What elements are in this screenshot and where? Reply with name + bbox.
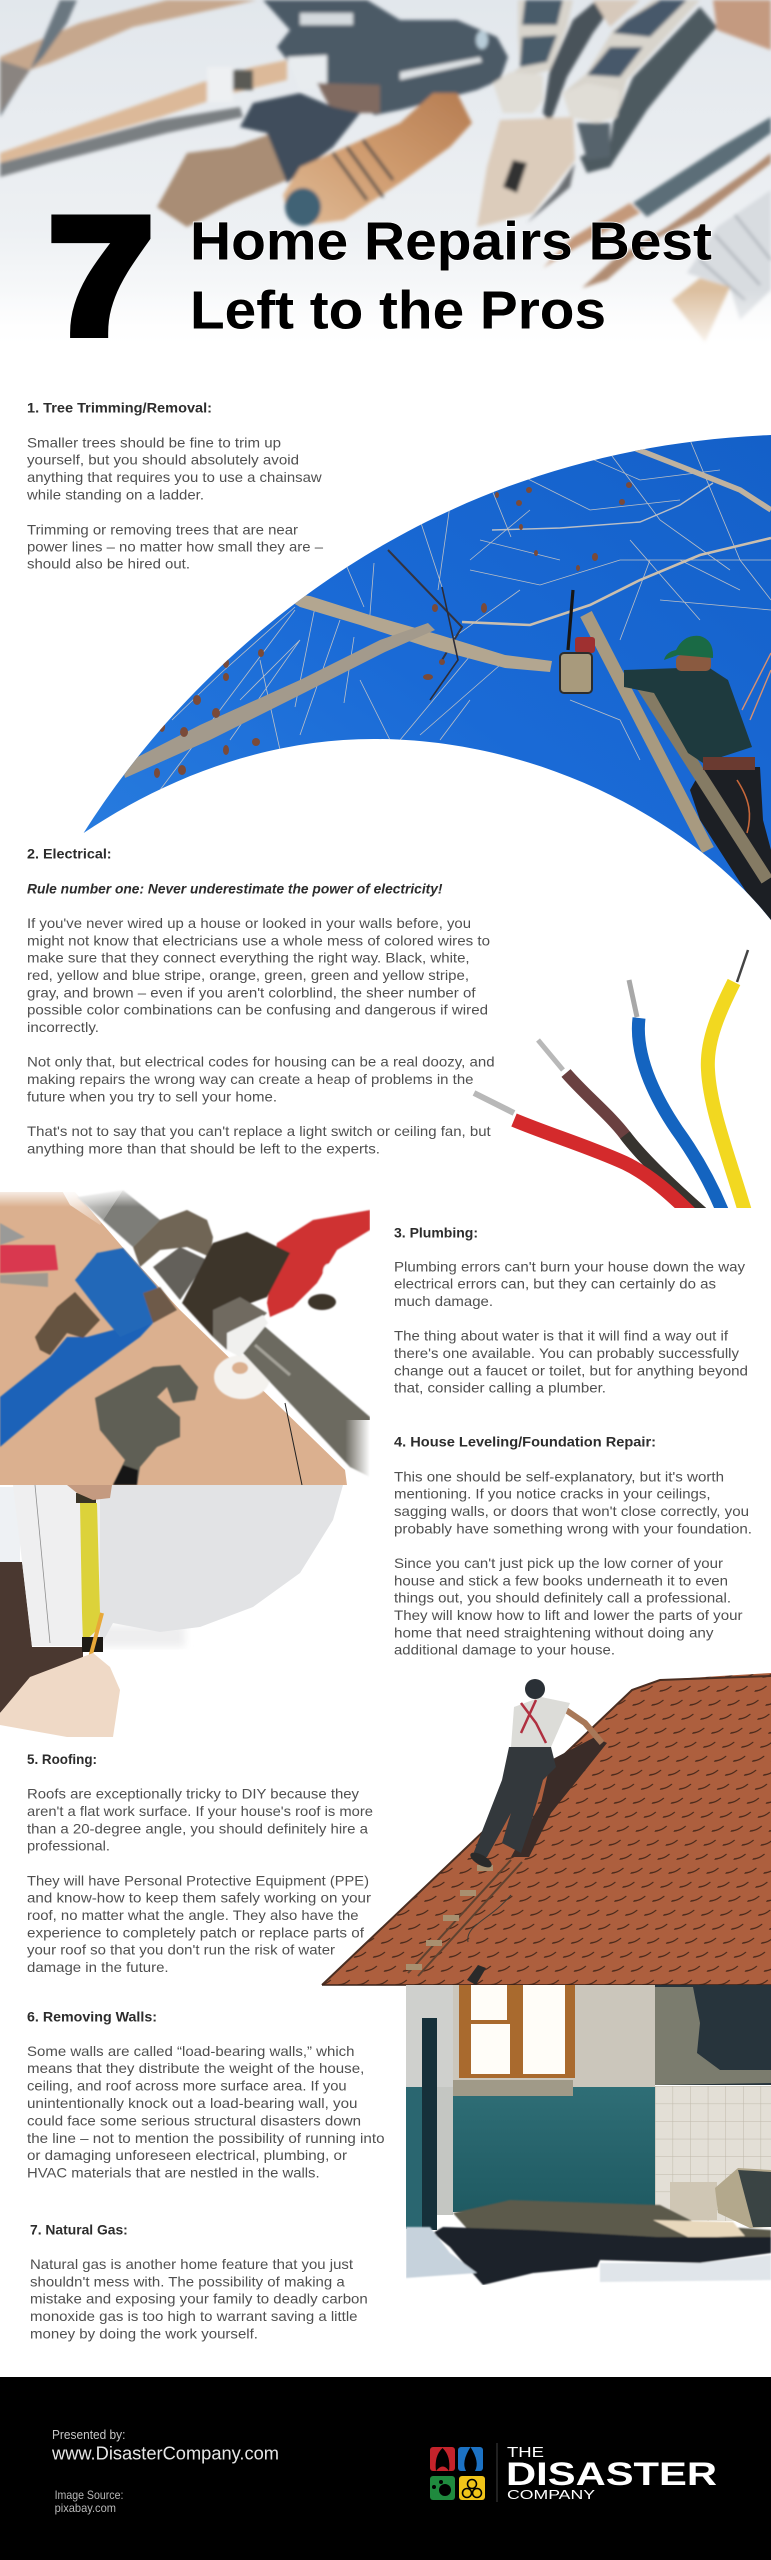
big number 7: 7 xyxy=(49,184,153,368)
paragraphs: change out a faucet or toilet, but for anything beyond xyxy=(394,1362,748,1378)
paragraph: means that they distribute the weight of the house, xyxy=(27,2060,364,2076)
photo: plumbing wrenches xyxy=(0,1187,370,1485)
section 7: natural gas text xyxy=(30,2222,368,2342)
paragraphs: making repairs the wrong way can create a heap of problems in the xyxy=(27,1071,474,1087)
paragraphs xyxy=(394,1468,752,1658)
photo: gutted room with demolished wall xyxy=(406,1985,771,2285)
roof ladder xyxy=(406,1860,522,1985)
paragraphs: roof, no matter what the angle. They also have the xyxy=(27,1907,359,1923)
hero photo: hand tools xyxy=(0,0,771,350)
website: www.DisasterCompany.com xyxy=(51,2444,279,2464)
paragraph: the line – not to mention the possibility of running into xyxy=(27,2130,385,2146)
title xyxy=(49,184,712,368)
heading: 3. Plumbing: xyxy=(394,1224,478,1240)
heading: 6. Removing Walls: xyxy=(27,2008,157,2024)
window xyxy=(459,1985,575,2078)
presented by label: Presented by: xyxy=(52,2427,125,2442)
heading: 7. Natural Gas: xyxy=(30,2222,128,2238)
paragraphs: that, consider calling a plumber. xyxy=(394,1380,606,1396)
title line 2: Left to the Pros xyxy=(190,280,606,340)
paragraphs: house and stick a few books underneath it to even xyxy=(394,1572,728,1588)
paragraph xyxy=(30,2256,368,2342)
paragraph: Trimming or removing trees that are near xyxy=(27,521,298,537)
paragraph: should also be hired out. xyxy=(27,556,190,572)
heading: 2. Electrical: xyxy=(27,845,112,861)
paragraphs: professional. xyxy=(27,1838,110,1854)
paragraphs: Plumbing errors can't burn your house down the way xyxy=(394,1258,745,1274)
logo wordmark: COMPANY xyxy=(507,2487,595,2502)
paragraphs: make sure that they connect everything the right way. Black, white, xyxy=(27,950,470,966)
paragraphs: gray, and brown – even if you aren't colorblind, the sheer number of xyxy=(27,984,476,1000)
icon: water tile xyxy=(458,2447,483,2471)
paragraphs: Roofs are exceptionally tricky to DIY because they xyxy=(27,1786,359,1802)
paragraphs: things out, you should definitely call a professional. xyxy=(394,1590,731,1606)
paragraphs: The thing about water is that it will find a way out if xyxy=(394,1328,728,1344)
paragraph: unintentionally knock out a load-bearing wall, you xyxy=(27,2095,357,2111)
paragraphs: If you've never wired up a house or looked in your walls before, you xyxy=(27,915,471,931)
chainsaw xyxy=(560,590,595,693)
photo: worker trimming tree on ladder xyxy=(80,430,771,925)
paragraph: anything that requires you to use a chainsaw xyxy=(27,469,323,485)
photo: coloured electrical wires xyxy=(474,950,748,1215)
logo wordmark: DISASTER xyxy=(506,2456,717,2492)
paragraph xyxy=(27,2043,385,2181)
paragraph: ceiling, and roof across more surface area. If you xyxy=(27,2078,347,2094)
section 5: roofing text xyxy=(27,1751,373,1975)
paragraphs: They will know how to lift and lower the parts of your xyxy=(394,1607,743,1623)
rule callout: Rule number one: Never underestimate the power of electricity! xyxy=(27,880,443,896)
section 1: tree trimming text xyxy=(26,400,323,572)
paragraphs: Since you can't just pick up the low corner of your xyxy=(394,1555,723,1571)
section 2: electrical text xyxy=(27,845,495,1156)
paragraphs: and know-how to keep them safely working on your xyxy=(27,1890,371,1906)
paragraph: Some walls are called “load-bearing walls,” which xyxy=(27,2043,354,2059)
image source label: Image Source: xyxy=(55,2488,123,2502)
logo wordmark: THE xyxy=(507,2444,544,2461)
title line 1: Home Repairs Best xyxy=(190,211,712,271)
paragraphs: aren't a flat work surface. If your house's roof is more xyxy=(27,1803,373,1819)
paragraphs: much damage. xyxy=(394,1293,493,1309)
section 6: removing walls text xyxy=(27,2008,385,2181)
paragraphs: probably have something wrong with your foundation. xyxy=(394,1520,752,1536)
paragraphs: sagging walls, or doors that won't close correctly, you xyxy=(394,1503,749,1519)
paragraph: yourself, but you should absolutely avoid xyxy=(27,452,299,468)
paragraph: monoxide gas is too high to warrant saving a little xyxy=(30,2308,358,2324)
paragraphs: mentioning. If you notice cracks in your ceilings, xyxy=(394,1486,710,1502)
paragraph: Natural gas is another home feature that you just xyxy=(30,2256,353,2272)
paragraph: HVAC materials that are nestled in the walls. xyxy=(27,2165,320,2181)
heading: 5. Roofing: xyxy=(27,1751,97,1767)
logo wordmark xyxy=(506,2444,717,2502)
photo: roofer on tiled roof xyxy=(322,1673,771,1985)
paragraphs: experience to completely patch or replace parts of xyxy=(27,1924,364,1940)
paragraph: power lines – no matter how small they are – xyxy=(27,538,323,554)
paragraphs: than a 20-degree angle, you should definitely hire a xyxy=(27,1820,368,1836)
paragraphs: They will have Personal Protective Equipment (PPE) xyxy=(27,1872,369,1888)
paragraphs: possible color combinations can be confusing and dangerous if wired xyxy=(27,1002,488,1018)
paragraphs xyxy=(394,1258,748,1396)
photo: tape measure against wall xyxy=(0,1485,343,1737)
paragraphs: might not know that electricians use a whole mess of colored wires to xyxy=(27,932,490,948)
paragraph: money by doing the work yourself. xyxy=(30,2326,258,2342)
paragraphs: damage in the future. xyxy=(27,1959,169,1975)
paragraphs: future when you try to sell your home. xyxy=(27,1088,277,1104)
paragraph: or damaging unforeseen electrical, plumbing, or xyxy=(27,2147,347,2163)
paragraphs: your roof so that you don't run the risk of water xyxy=(27,1942,335,1958)
paragraphs: anything more than that should be left to the experts. xyxy=(27,1140,380,1156)
paragraph: while standing on a ladder. xyxy=(26,486,204,502)
paragraph: shouldn't mess with. The possibility of making a xyxy=(30,2273,345,2289)
paragraphs: additional damage to your house. xyxy=(394,1642,615,1658)
rubble floor xyxy=(406,2200,771,2285)
tree trunk ladder rails xyxy=(586,614,771,925)
section 4: foundation text xyxy=(394,1434,752,1658)
heading: 1. Tree Trimming/Removal: xyxy=(27,400,212,416)
paragraphs xyxy=(27,1786,373,1975)
paragraphs: home that need straightening without doing any xyxy=(394,1624,714,1640)
worker xyxy=(624,636,755,833)
paragraphs: electrical errors can, but they can certainly do as xyxy=(394,1276,716,1292)
paragraph: Smaller trees should be fine to trim up xyxy=(27,434,281,450)
icon: biohazard tile xyxy=(459,2476,485,2500)
paragraphs: incorrectly. xyxy=(27,1019,99,1035)
hand holding pencil xyxy=(0,1653,120,1737)
icon: mold tile xyxy=(430,2476,455,2500)
roofer figure xyxy=(468,1679,607,1870)
paragraphs xyxy=(27,915,495,1156)
image source value: pixabay.com xyxy=(55,2501,116,2515)
paragraphs: Not only that, but electrical codes for housing can be a real doozy, and xyxy=(27,1054,495,1070)
paragraphs: That's not to say that you can't replace a light switch or ceiling fan, but xyxy=(27,1123,491,1139)
paragraph: mistake and exposing your family to deadly carbon xyxy=(30,2291,368,2307)
icon: fire tile xyxy=(430,2447,455,2471)
logo: The Disaster Company xyxy=(430,2443,717,2502)
section 3: plumbing text xyxy=(394,1224,748,1396)
paragraph: could face some serious structural disasters down xyxy=(27,2112,361,2128)
footer band xyxy=(0,2377,771,2560)
paragraphs: there's one available. You can probably successfully xyxy=(394,1345,739,1361)
paragraphs: red, yellow and blue stripe, orange, green, green and yellow stripe, xyxy=(27,967,469,983)
heading: 4. House Leveling/Foundation Repair: xyxy=(394,1434,656,1450)
paragraph xyxy=(26,434,323,572)
paragraphs: This one should be self-explanatory, but it's worth xyxy=(394,1468,724,1484)
